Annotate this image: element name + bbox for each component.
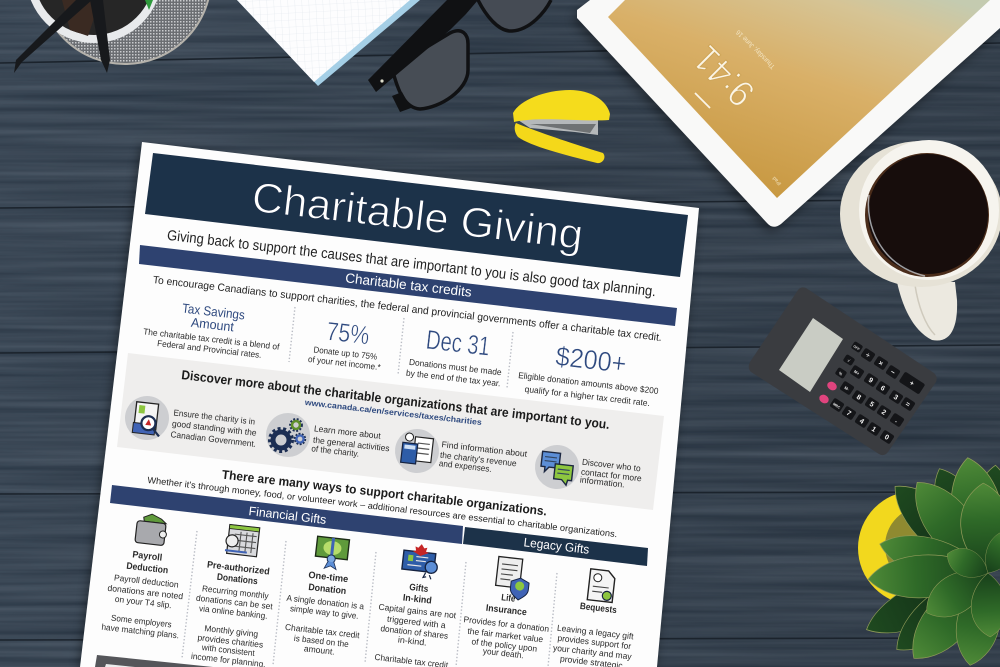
calculator keys <box>818 341 925 444</box>
tablet clock: iPad <box>771 175 783 186</box>
stat: tax savings amount: Federal and Provincial rates. <box>157 338 262 360</box>
text: revenue and expenses: Find information about <box>441 439 528 459</box>
column: pre-authorized donations: Recurring monthly <box>201 583 270 601</box>
calculator keys: = <box>904 401 911 409</box>
column: pre-authorized donations: with consistent <box>201 642 256 658</box>
calculator keys: 6 <box>879 385 886 393</box>
column: life insurance: of the policy upon <box>471 636 538 654</box>
column: bequests: your charity and may <box>553 643 633 662</box>
column: gifts in-kind: Gifts <box>409 581 429 594</box>
calculator keys: 7 <box>845 410 852 418</box>
tablet clock: 9:41 <box>686 37 763 114</box>
stat: Dec 31 <box>406 325 502 388</box>
column: life insurance: your death. <box>482 646 524 660</box>
stat: Dec 31: by the end of the tax year. <box>406 368 501 388</box>
calculator keys: − <box>889 369 896 377</box>
column: pre-authorized donations: Donations <box>216 571 258 586</box>
text: general activities <box>311 423 390 459</box>
column: life insurance: the fair market value <box>467 626 544 644</box>
column: one-time donation: One-time <box>308 569 349 584</box>
text: revenue and expenses: the charity's revenue <box>440 450 517 468</box>
stat: tax savings amount: Amount <box>190 315 235 334</box>
paper shadow <box>78 145 697 667</box>
stat: tax savings amount: Tax Savings <box>181 301 246 323</box>
footer box, cropped at the page edge <box>95 655 213 667</box>
notebook <box>237 0 420 86</box>
calculator keys: ÷ <box>864 352 871 360</box>
icon: cash with ribbon <box>314 536 349 571</box>
text: revenue and expenses <box>438 439 528 474</box>
column: one-time donation: amount. <box>303 643 335 657</box>
text: revenue and expenses: and expenses. <box>438 458 492 474</box>
calculator keys: 1 <box>870 426 877 434</box>
column: one-time donation: A single donation is a <box>286 593 365 611</box>
column: one-time donation: simple way to give. <box>289 603 359 621</box>
bar: financial gifts <box>110 485 463 544</box>
column: pre-authorized donations: donations can be set <box>196 593 274 611</box>
intro text: To encourage Canadians to support charities, the federal and provincial governments offer a charitable tax credit. <box>152 274 662 344</box>
icon: calendar <box>225 524 260 557</box>
panel url: www.canada.ca/en/services/taxes/charities <box>303 398 483 427</box>
column: bequests: Leaving a legacy gift <box>557 623 635 641</box>
glasses <box>368 0 551 112</box>
column: payroll deduction: Deduction <box>126 560 169 575</box>
calculator keys: + <box>908 380 915 388</box>
calculator keys: % <box>838 370 844 377</box>
column: gifts in-kind: donation of shares <box>380 623 449 641</box>
calculator <box>749 287 937 455</box>
calculator keys: 2 <box>880 409 887 417</box>
text: who to contact: contact for more <box>580 467 642 483</box>
stat: $200+ <box>518 341 659 408</box>
title banner: Charitable Giving <box>250 173 586 258</box>
bar: financial gifts: Financial Gifts <box>248 504 327 527</box>
stat: Dec 31: Dec 31 <box>425 325 492 362</box>
column: life insurance: Provides for a donation <box>463 614 550 634</box>
column: payroll deduction: Payroll <box>132 548 163 563</box>
column: gifts in-kind: triggered with a <box>386 614 446 630</box>
text: general activities: of the charity. <box>311 443 360 459</box>
column: gifts in-kind: Capital gains are not <box>378 602 457 620</box>
text: general activities: Learn more about <box>313 423 382 441</box>
column: pre-authorized donations: Pre-authorized <box>206 558 271 577</box>
section bar: charitable tax credits: Charitable tax credits <box>345 270 473 300</box>
column: bequests: provides support for <box>557 633 632 651</box>
text: good standing: Ensure the charity is in <box>173 407 256 427</box>
text: general activities: the general activities <box>313 435 390 453</box>
tablet clock: Thursday, June 16 <box>735 28 777 70</box>
panel: discover more <box>117 353 664 510</box>
infographic paper <box>80 142 699 667</box>
icon: wallet <box>135 513 169 546</box>
calculator keys: 9 <box>867 377 874 385</box>
column: payroll deduction: Payroll deduction <box>113 572 179 590</box>
stat: 75% <box>308 316 382 372</box>
icon: chat bubbles <box>533 443 581 491</box>
calculator screen <box>779 318 843 392</box>
column: payroll deduction: Some employers <box>110 613 172 629</box>
bar: legacy gifts: Legacy Gifts <box>523 535 590 557</box>
stat: 75%: Donate up to 75% <box>313 344 378 362</box>
text: who to contact <box>579 457 642 490</box>
column: payroll deduction: have matching plans. <box>101 622 180 640</box>
column: gifts in-kind: in-kind. <box>397 634 427 648</box>
bar: legacy gifts <box>463 527 648 566</box>
tablet clock <box>686 28 783 186</box>
column: bequests: Bequests <box>579 600 617 615</box>
column: life insurance: Life <box>501 591 516 604</box>
column: pre-authorized donations: via online banking. <box>198 603 268 621</box>
column: payroll deduction: donations are noted <box>107 583 184 601</box>
title banner <box>145 153 688 277</box>
text: good standing: Canadian Government. <box>170 429 257 449</box>
coffee cup <box>840 140 1000 341</box>
calculator keys: 5 <box>868 401 875 409</box>
text: good standing <box>170 407 257 449</box>
succulent plant in yellow pot <box>858 453 1000 667</box>
calculator keys: 0 <box>883 434 890 442</box>
calculator keys: 4 <box>858 418 865 426</box>
calculator keys: M+ <box>853 369 861 376</box>
panel heading: Discover more about the charitable organizations that are important to you. <box>181 367 610 432</box>
stat: Dec 31: Donations must be made <box>409 357 502 377</box>
text: who to contact: information. <box>579 475 625 490</box>
stat: $200+: Eligible donation amounts above $200 <box>518 370 659 396</box>
stat: $200+: qualify for a higher tax credit rate. <box>524 384 651 408</box>
column: life insurance <box>463 557 550 660</box>
calculator keys: MRC <box>832 402 841 410</box>
stat: $200+: $200+ <box>554 341 628 379</box>
column: pre-authorized donations: provides charities <box>197 632 264 650</box>
calculator keys: × <box>877 360 884 368</box>
calculator keys: M- <box>843 385 851 392</box>
calculator keys: OFF <box>852 344 861 352</box>
text: good standing: good standing with the <box>172 418 257 438</box>
text: who to contact: Discover who to <box>581 457 641 473</box>
yellow stapler <box>513 90 610 163</box>
tablet <box>574 0 1000 232</box>
column: payroll deduction <box>101 513 184 640</box>
stat: 75%: 75% <box>325 316 371 350</box>
column: one-time donation: Charitable tax credit <box>285 622 361 640</box>
paper sheet <box>80 142 699 667</box>
column: gifts in-kind <box>374 542 457 667</box>
stat: tax savings amount: The charitable tax credit is a blend of <box>143 326 281 352</box>
icon: document with magnifier <box>123 394 171 442</box>
column: life insurance: Insurance <box>485 602 527 617</box>
section bar: charitable tax credits <box>139 245 677 326</box>
icon: policy with shield <box>494 557 532 601</box>
icon: will document with seal <box>587 569 616 602</box>
heading: many ways: There are many ways to support charitable organizations. <box>221 468 548 518</box>
column: gifts in-kind: In-kind <box>402 591 433 606</box>
stat: 75%: of your net income.* <box>308 354 382 372</box>
column: one-time donation: Donation <box>308 581 347 596</box>
subheading: Whether it's through money, food, or volunteer work – additional resources are essential to charitable organizations. <box>147 475 618 539</box>
column: one-time donation <box>285 536 365 657</box>
icon: maple leaf share certificate <box>401 542 440 580</box>
column: one-time donation: is based on the <box>293 633 349 649</box>
calculator keys: . <box>894 417 899 424</box>
stat: tax savings amount <box>143 301 281 360</box>
column: bequests <box>553 569 635 667</box>
column: pre-authorized donations: Monthly giving <box>204 623 259 639</box>
icon: gears <box>266 413 310 457</box>
calculator keys: √ <box>846 358 852 364</box>
calculator keys: 8 <box>855 394 862 402</box>
column: payroll deduction: on your T4 slip. <box>114 594 172 610</box>
pen cup with pencils <box>14 0 211 73</box>
icon: calculator and statement <box>393 427 441 475</box>
column: pre-authorized donations <box>191 524 274 667</box>
subtitle: Giving back to support the causes that are important to you is also good tax planning. <box>166 228 657 300</box>
calculator keys: 3 <box>892 394 899 402</box>
